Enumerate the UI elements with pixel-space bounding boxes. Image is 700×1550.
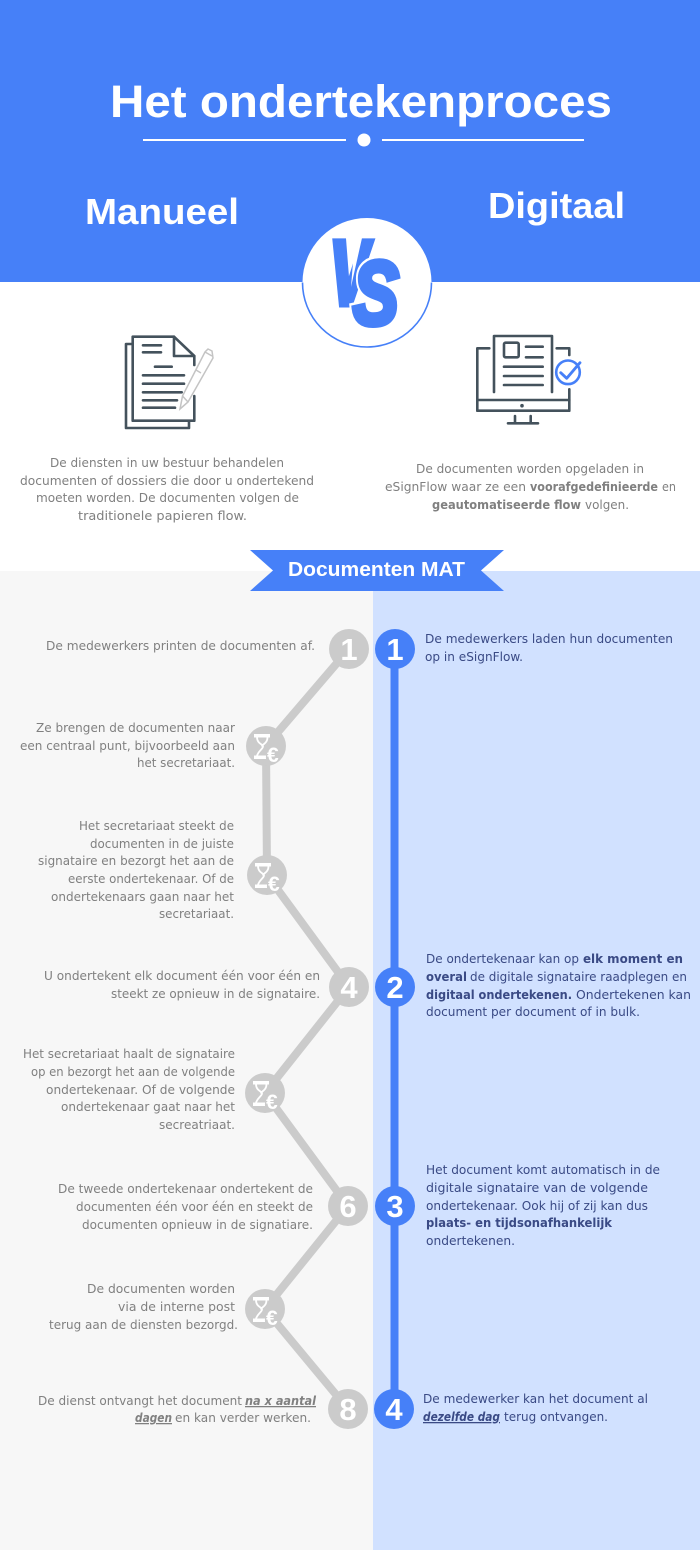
digital text 4 [423,1392,648,1425]
manual wait icon 4 [245,1289,285,1330]
intro text: digital [385,462,676,513]
manual text 2 [20,721,236,771]
manual wait icon 3 [245,1073,285,1114]
intro text: manual: traditionele papieren flow. [78,509,247,524]
digital text 1: op in eSignFlow. [425,650,523,665]
manual step 8 [328,1389,368,1429]
intro text: manual: moeten worden. De documenten volgen de [36,491,299,506]
manual text 5: secreatriaat. [159,1118,235,1133]
digital text 2: elk moment en [583,952,683,967]
manual text 4: U ondertekent elk document één voor één en [44,969,320,984]
manual text 3: eerste ondertekenaar. Of de [68,872,234,887]
intro text: digital: voorafgedefinieerde [530,480,658,495]
manual wait icon 2: € [268,873,280,896]
manual wait icon 4: € [266,1307,278,1330]
digital text 4: terug ontvangen. [504,1410,608,1425]
intro text: manual: De diensten in uw bestuur behandelen [50,456,284,471]
digital step 4 [374,1389,414,1429]
intro text: digital: De documenten worden opgeladen in [416,462,644,477]
ribbon: Documenten MAT: Documenten MAT [288,559,465,581]
intro text: manual [20,456,314,524]
manual text 3: Het secretariaat steekt de [79,819,234,834]
manual text 5: Het secretariaat haalt de signataire [23,1047,235,1062]
manual text 6: documenten opnieuw in de signatiare. [82,1218,313,1233]
manual step 4: 4 [340,970,358,1005]
manual text 2: het secretariaat. [137,756,235,771]
manual text 8 [38,1394,317,1426]
manual wait icon 3: € [266,1091,278,1114]
manual text 7: De documenten worden [87,1282,235,1297]
manual step 1: 1 [340,632,358,667]
manual text 4: steekt ze opnieuw in de signataire. [111,987,320,1002]
manual wait icon 1: € [267,744,279,767]
intro text: digital: en [662,480,676,495]
digital step 1: 1 [386,632,404,667]
title: Het ondertekenproces [110,76,612,127]
heading: Digitaal: Digitaal [488,185,625,226]
manual timeline line [265,649,349,1409]
digital text 2: Ondertekenen kan [576,988,691,1003]
manual text 4 [44,969,320,1002]
VS badge: S [353,243,399,343]
heading: Manueel: Manueel [85,191,239,232]
manual text 3: secretariaat. [159,907,234,922]
digital step 1 [375,629,415,669]
VS badge: S [353,243,399,343]
digital text 2: document per document of in bulk. [426,1005,640,1020]
digital text 2: overal [426,970,467,985]
manual text 1: De medewerkers printen de documenten af. [46,639,315,654]
VS badge: V [331,225,371,322]
manual text 2: een centraal punt, bijvoorbeeld aan [20,739,235,754]
digital text 2: digitaal ondertekenen. [426,988,572,1003]
right panel background [373,571,700,1550]
manual text 7: terug aan de diensten bezorgd. [49,1318,238,1333]
digital text 1: De medewerkers laden hun documenten [425,632,673,647]
digital timeline line [390,649,398,1409]
manual text 5: ondertekenaar gaat naar het [61,1100,235,1115]
digital text 2 [426,952,691,1020]
left panel background [0,571,373,1550]
manual text 2: Ze brengen de documenten naar [36,721,236,736]
manual text 8: en kan verder werken. [175,1411,311,1426]
digital text 3: plaats- en tijdsonafhankelijk [426,1216,612,1231]
digital text 3 [426,1163,660,1249]
digital text 4: dezelfde dag [423,1410,500,1425]
manual text 5: ondertekenaar. Of de volgende [46,1083,235,1098]
digital text 3: ondertekenaar. Ook hij of zij kan dus [426,1199,648,1214]
intro text: digital: volgen. [585,498,629,513]
manual wait icon 2 [247,855,287,896]
digital step 3: 3 [386,1189,404,1224]
manual text 3: ondertekenaars gaan naar het [51,890,234,905]
manual text 8: De dienst ontvangt het document [38,1394,242,1409]
manual text 6: De tweede ondertekenaar ondertekent de [58,1182,313,1197]
intro text: digital: eSignFlow waar ze een [385,480,526,495]
header band [0,0,700,282]
manual wait icon 1 [246,726,286,767]
digital step 4: 4 [385,1392,403,1427]
manual text 7: via de interne post [118,1300,235,1315]
digital step 2: 2 [386,970,404,1005]
icon: monitor with document and check mark [477,336,580,423]
digital text 3: Het document komt automatisch in de [426,1163,660,1178]
digital text 3: digitale signataire van de volgende [426,1181,648,1196]
manual text 5 [23,1047,235,1133]
title divider [143,134,584,146]
manual text 6: documenten één voor één en steekt de [76,1200,313,1215]
manual text 3: documenten in de juiste [90,837,234,852]
VS badge [302,218,432,347]
digital text 3: ondertekenen. [426,1234,515,1249]
manual text 7 [49,1282,238,1333]
manual step 1 [329,629,369,669]
manual step 6 [328,1186,368,1226]
digital text 2: De ondertekenaar kan op [426,952,579,967]
intro text: manual: documenten of dossiers die door u ondertekend [20,474,314,489]
manual text 3: signataire en bezorgt het aan de [38,854,234,869]
manual text 3 [38,819,234,922]
manual text 6 [58,1182,313,1233]
manual step 8: 8 [339,1392,357,1427]
digital text 2: de digitale signataire raadplegen en [470,970,687,985]
digital step 3 [375,1186,415,1226]
digital text 4: De medewerker kan het document al [423,1392,648,1407]
ribbon: Documenten MAT [250,550,504,591]
manual text 8: dagen [135,1411,172,1426]
manual step 4 [329,967,369,1007]
manual text 8: na x aantal [245,1394,317,1409]
intro text: digital: geautomatiseerde flow [432,498,581,513]
digital step 2 [375,967,415,1007]
digital text 1 [425,632,673,665]
icon: paper document and pen [126,337,213,428]
manual text 5: op en bezorgt het aan de volgende [31,1065,235,1080]
manual step 6: 6 [339,1189,357,1224]
